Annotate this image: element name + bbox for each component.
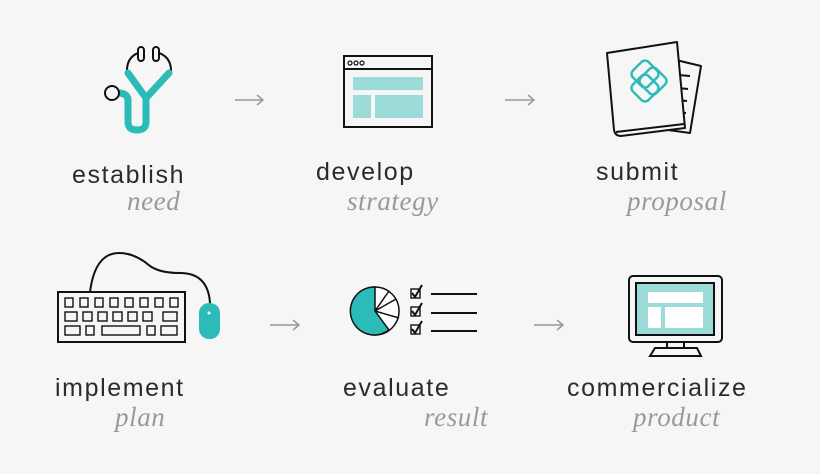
label: evaluate result: result — [424, 402, 489, 432]
icon: stethoscope — [105, 47, 171, 130]
label: implement plan: plan — [113, 402, 165, 432]
icon: keyboard and mouse — [58, 253, 220, 342]
label: submit proposal: proposal — [625, 186, 727, 216]
arrow 2 — [505, 95, 534, 105]
label: develop strategy — [316, 158, 439, 216]
icon: proposal document — [607, 42, 701, 136]
label: commercialize product: commercialize — [567, 374, 748, 402]
label: commercialize product — [567, 374, 748, 432]
label: establish need — [72, 161, 185, 216]
label: establish need: establish — [72, 161, 185, 189]
label: submit proposal — [596, 158, 727, 216]
label: evaluate result: evaluate — [343, 374, 450, 402]
arrow 1 — [235, 95, 263, 105]
arrow 4 — [534, 320, 563, 330]
icon: browser window — [344, 56, 432, 127]
label: implement plan: implement — [55, 374, 185, 402]
arrow 3 — [270, 320, 299, 330]
label: establish need: need — [127, 186, 180, 216]
label: develop strategy: strategy — [347, 186, 439, 216]
icon: monitor — [629, 276, 722, 356]
label: develop strategy: develop — [316, 158, 415, 186]
label: submit proposal: submit — [596, 158, 679, 186]
label: commercialize product: product — [631, 402, 721, 432]
label: implement plan — [55, 374, 185, 432]
icon: pie chart with checklist — [350, 285, 477, 335]
label: evaluate result — [343, 374, 489, 432]
